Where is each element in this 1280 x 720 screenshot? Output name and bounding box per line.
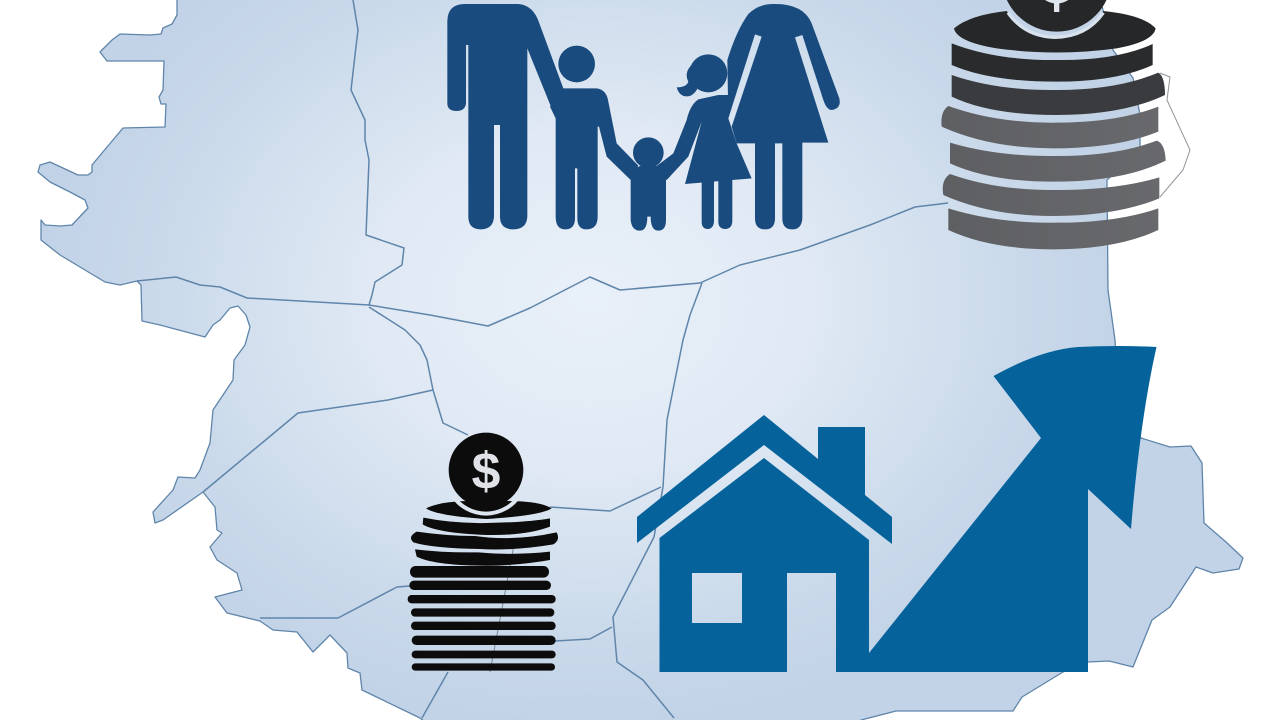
icon: house with rising arrow: [637, 346, 1156, 672]
house body with door and window: [660, 458, 869, 672]
girl: [657, 54, 752, 229]
coin band 6: [943, 174, 1159, 216]
icon: family of four: [447, 4, 840, 231]
mother: [727, 4, 840, 229]
icon: large coin stack: [941, 0, 1166, 249]
coin with dollar sign: [449, 433, 523, 507]
thin outline right of large stack: [1160, 73, 1190, 197]
coin with dollar sign: [1002, 0, 1112, 37]
house roof: [637, 415, 892, 544]
coin band 3: [952, 73, 1165, 115]
boy: [550, 46, 638, 229]
region borders: [137, 0, 948, 718]
rising arrow: [869, 346, 1156, 672]
father: [447, 4, 563, 229]
coin band 4: [941, 106, 1158, 148]
coin bands: [408, 501, 558, 671]
top coin ellipse: [954, 11, 1156, 52]
coin with dollar sign: $: [472, 441, 500, 499]
toddler: [631, 137, 670, 231]
coin band 2: [952, 43, 1153, 82]
coin band 5: [950, 141, 1166, 182]
coin band 7: [948, 208, 1158, 249]
coin ring: [453, 497, 519, 514]
icon: small coin stack: [408, 433, 558, 671]
